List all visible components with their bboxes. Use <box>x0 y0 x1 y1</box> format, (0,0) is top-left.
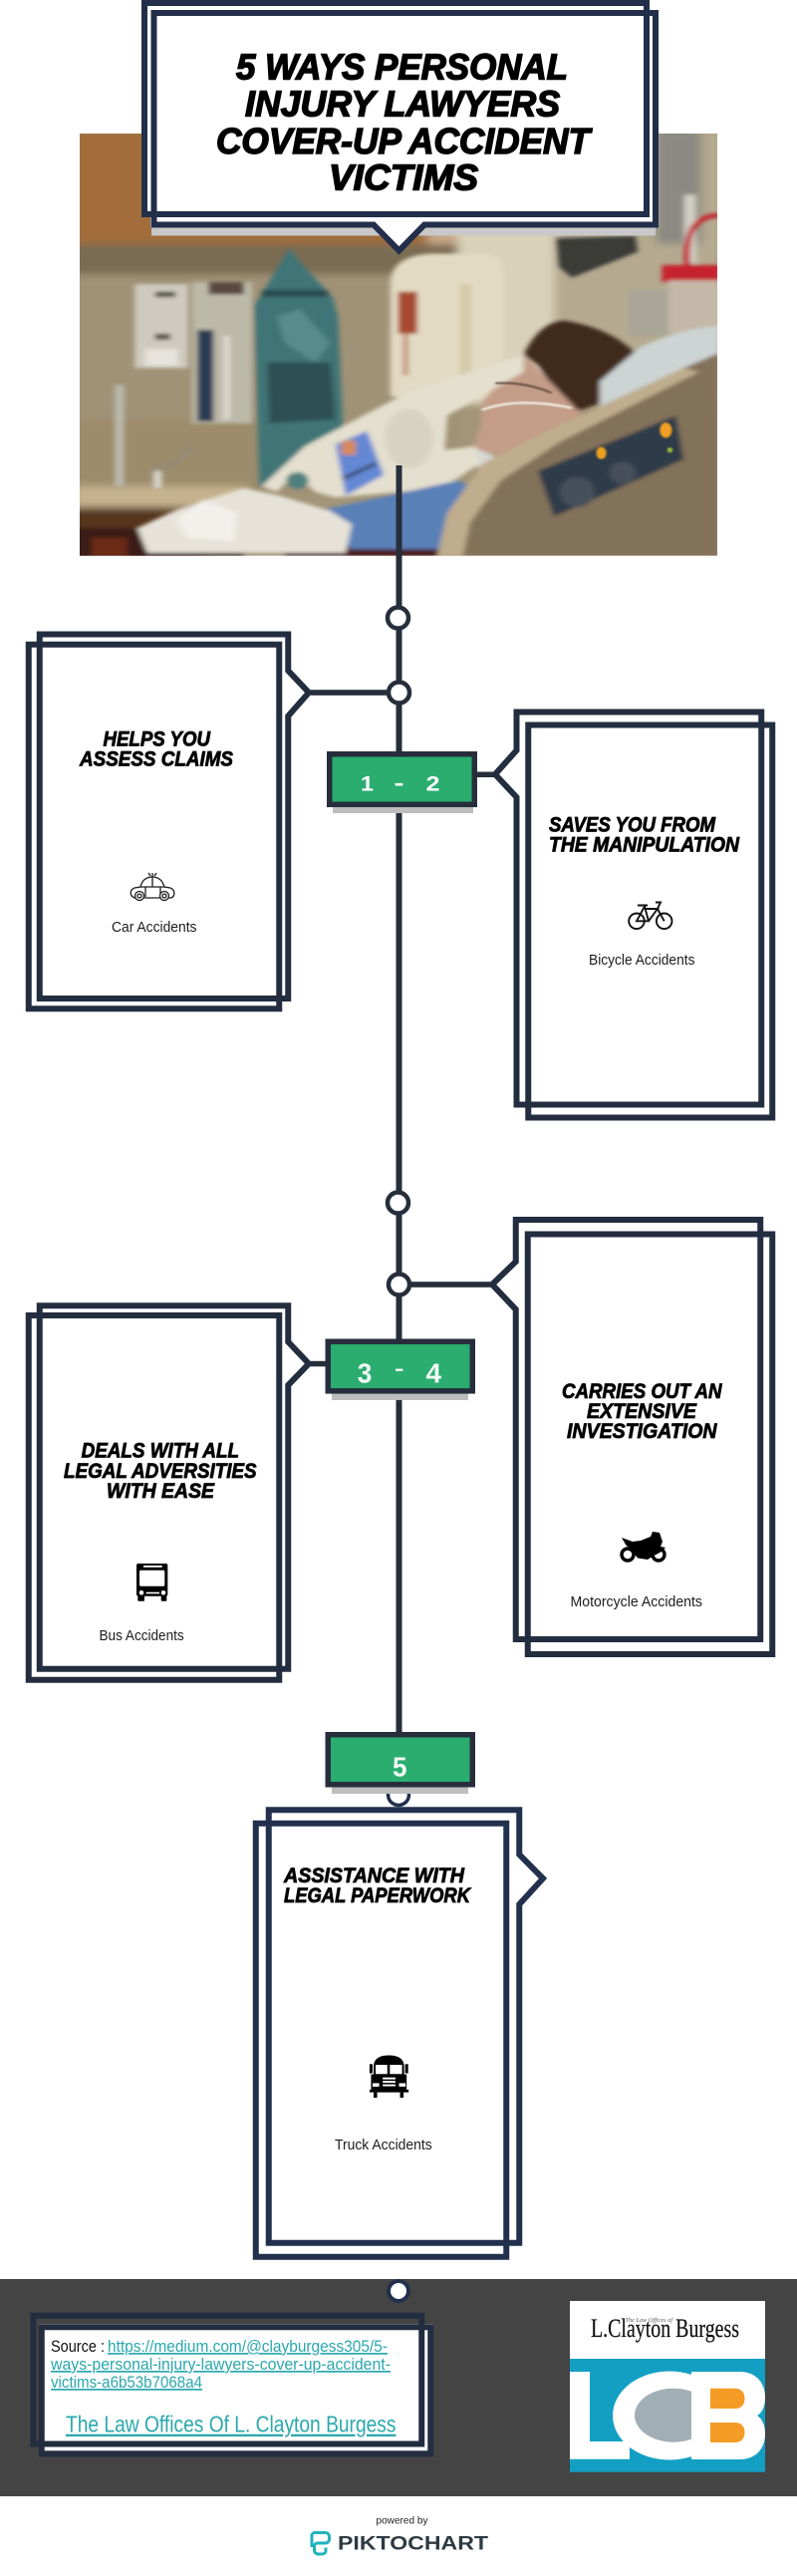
card 2: saves you from the manipulation <box>495 712 772 1118</box>
title box <box>141 0 659 253</box>
icon: police car <box>131 873 174 901</box>
icon: bus <box>136 1564 167 1601</box>
badge 3-4: 4 <box>426 1358 441 1389</box>
card 1 heading <box>79 727 233 770</box>
title text: 5 WAYS PERSONAL <box>236 47 568 88</box>
timeline spine <box>397 465 402 1736</box>
icon: motorcycle <box>622 1532 665 1561</box>
badge 5: 5 <box>393 1751 406 1782</box>
title text: INJURY LAWYERS <box>245 84 560 125</box>
logo: L. Clayton Burgess: L.Clayton Burgess <box>591 2314 739 2343</box>
source text: https://medium.com/@clayburgess305/5- <box>108 2337 388 2356</box>
card 1 heading: HELPS YOU <box>104 727 211 751</box>
card 3 heading <box>562 1380 722 1443</box>
title text <box>216 47 593 198</box>
source text: victims-a6b53b7068a4 <box>51 2373 202 2392</box>
law office link: The Law Offices Of L. Clayton Burgess <box>66 2412 397 2437</box>
timeline node 3 <box>388 1192 408 1214</box>
badge 1-2 with connector: 2 <box>426 773 440 795</box>
badge 3-4: - <box>395 1358 404 1380</box>
source text: Source : <box>51 2337 105 2356</box>
powered by piktochart <box>312 2516 488 2555</box>
powered by piktochart: powered by <box>377 2516 428 2527</box>
timeline node 2 with connector <box>311 682 409 704</box>
label: car accidents: Car Accidents <box>112 920 197 936</box>
card 5: assistance with legal paperwork <box>256 1810 543 2257</box>
card 3: carries out an extensive investigation <box>492 1220 772 1654</box>
badge 3-4: 3 <box>358 1358 372 1389</box>
badge 1-2 with connector: 1 <box>361 773 374 795</box>
icon: piktochart mark <box>312 2533 329 2554</box>
card 4: deals with all legal adversities with ease <box>29 1305 327 1680</box>
card 2 heading: SAVES YOU FROM <box>549 814 715 837</box>
timeline node 5 under badge <box>389 1784 408 1806</box>
powered by piktochart: PIKTOCHART <box>338 2534 488 2555</box>
badge 1-2 with connector <box>330 754 495 813</box>
label: bus accidents: Bus Accidents <box>100 1628 184 1644</box>
label: truck accidents: Truck Accidents <box>335 2138 432 2153</box>
icon: school bus front <box>370 2056 408 2098</box>
title text: COVER-UP ACCIDENT <box>216 121 593 161</box>
logo letters LCB <box>570 2372 765 2459</box>
badge 5 <box>328 1735 472 1794</box>
card 3 heading: CARRIES OUT AN <box>562 1380 722 1403</box>
card 4 heading: WITH EASE <box>107 1480 215 1503</box>
source text <box>50 2337 391 2392</box>
card 1: helps you assess claims <box>29 634 309 1008</box>
card 3 heading: EXTENSIVE <box>587 1400 697 1423</box>
card 2 heading: THE MANIPULATION <box>549 834 740 857</box>
card 4 heading: DEALS WITH ALL <box>82 1439 239 1463</box>
icon: bicycle <box>629 903 671 929</box>
source text: ways-personal-injury-lawyers-cover-up-accident- <box>50 2355 391 2374</box>
logo: L. Clayton Burgess <box>570 2301 765 2472</box>
photo: patient in hospital bed <box>71 130 721 561</box>
badge 3-4 <box>328 1341 472 1400</box>
label: motorcycle accidents: Motorcycle Accidents <box>570 1594 702 1610</box>
title text: VICTIMS <box>329 157 478 198</box>
logo: L. Clayton Burgess: The Law Offices of <box>626 2317 673 2324</box>
timeline node 4 with connector <box>389 1274 492 1295</box>
card 3 heading: INVESTIGATION <box>567 1420 717 1443</box>
source box <box>33 2316 433 2456</box>
card 5 heading: LEGAL PAPERWORK <box>284 1884 472 1907</box>
card 1 heading: ASSESS CLAIMS <box>79 747 233 770</box>
card 4 heading: LEGAL ADVERSITIES <box>64 1460 257 1483</box>
card 5 heading <box>283 1864 472 1907</box>
card 2 heading <box>549 814 740 857</box>
timeline end node <box>389 2281 408 2301</box>
card 5 heading: ASSISTANCE WITH <box>283 1864 465 1887</box>
badge 1-2 with connector: - <box>395 772 404 795</box>
label: bicycle accidents: Bicycle Accidents <box>589 953 695 969</box>
footer band <box>0 2279 797 2496</box>
card 4 heading <box>64 1439 257 1503</box>
timeline node 1 <box>388 608 408 628</box>
